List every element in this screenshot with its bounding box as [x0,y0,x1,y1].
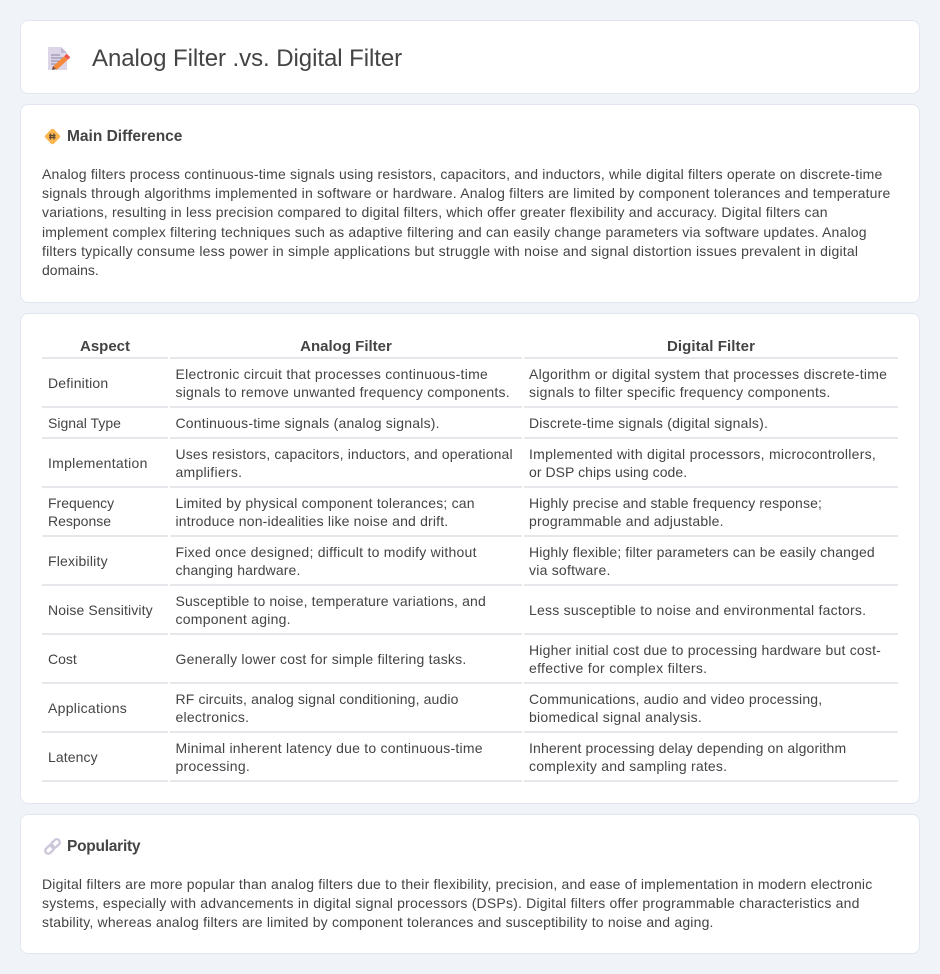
row: noise sensitivity [42,593,898,635]
row: flexibility [42,544,898,586]
row: implementation [42,446,898,488]
row: signal type: Signal Type [48,415,121,431]
table header: analog filter: Analog Filter [300,338,392,355]
row: latency: Latency [48,749,98,765]
row: definition: Electronic circuit that processes continuous-time [176,366,488,382]
row: cost [42,642,898,684]
text block: main difference: filters typically consume less power in simple applications but struggle with noise and signal distortion issues prevalent in digital [42,243,858,259]
text block: popularity: systems, especially with advancements in digital signal processors (DSPs). Digital filters offer programmable characteristics and [42,895,860,911]
text block: main difference [42,166,891,278]
row: cost: Cost [48,651,77,667]
table header: digital filter: Digital Filter [667,338,755,355]
row: latency: processing. [176,758,250,774]
row: implementation: Uses resistors, capacitors, inductors, and operational [176,446,513,462]
row: implementation: or DSP chips using code. [529,464,687,480]
row: frequency response: Response [48,513,111,529]
panel: comparison table [20,313,920,804]
heading: popularity: Popularity [67,838,140,855]
row: frequency response: Frequency [48,495,114,511]
row: signal type: Discrete-time signals (digital signals). [529,415,768,431]
row: implementation: amplifiers. [176,464,242,480]
row: noise sensitivity: Susceptible to noise, temperature variations, and [176,593,486,609]
row: frequency response: programmable and adjustable. [529,513,724,529]
row: flexibility: Flexibility [48,553,108,569]
row: noise sensitivity: Noise Sensitivity [48,602,153,618]
row: flexibility: via software. [529,562,611,578]
row: signal type: Continuous-time signals (analog signals). [176,415,440,431]
panel: main difference [20,104,920,303]
header card [20,20,920,94]
table header: aspect [42,337,168,359]
icon: chain link [44,838,61,855]
row: noise sensitivity: Less susceptible to noise and environmental factors. [529,602,866,618]
row: latency: complexity and sampling rates. [529,758,727,774]
text block: popularity [42,876,872,930]
row: cost: Higher initial cost due to processing hardware but cost- [529,642,881,658]
row: definition: Definition [48,375,108,391]
row: signal type [42,415,898,439]
row: applications: biomedical signal analysis. [529,709,702,725]
row: implementation: Implementation [48,455,148,471]
row: applications: Applications [48,700,127,716]
row: applications: RF circuits, analog signal conditioning, audio [176,691,459,707]
text block: popularity: Digital filters are more popular than analog filters due to their flexibility, precision, and ease of implementation in modern electronic [42,876,872,892]
row: definition: signals to remove unwanted frequency components. [176,384,510,400]
text block: main difference: signals through algorithms implemented in software or hardware. Analog filters are limited by component tolerances and temperature [42,185,891,201]
icon: document with pencil [48,47,70,70]
row: cost: Generally lower cost for simple filtering tasks. [176,651,466,667]
panel: popularity [20,814,920,954]
row: frequency response: introduce non-idealities like noise and drift. [176,513,448,529]
row: frequency response: Limited by physical component tolerances; can [176,495,475,511]
row: flexibility: Fixed once designed; difficult to modify without [176,544,477,560]
row: frequency response [42,495,898,537]
row: applications: Communications, audio and video processing, [529,691,822,707]
row: frequency response: Highly precise and stable frequency response; [529,495,822,511]
text block: main difference: domains. [42,262,99,278]
row: definition: signals to filter specific frequency components. [529,384,830,400]
heading: main difference: Main Difference [67,128,182,145]
row: definition [42,366,898,408]
row: implementation: Implemented with digital processors, microcontrollers, [529,446,876,462]
text block: main difference: implement complex filtering techniques such as adaptive filtering and can easily change parameters via software updates. Analog [42,224,867,240]
row: definition: Algorithm or digital system that processes discrete-time [529,366,887,382]
icon: warning diamond [44,128,60,144]
row: flexibility: changing hardware. [176,562,300,578]
table header: digital filter [524,337,898,359]
row: noise sensitivity: component aging. [176,611,291,627]
row: latency [42,740,898,782]
table header: aspect: Aspect [80,338,130,355]
row: latency: Inherent processing delay depending on algorithm [529,740,846,756]
row: cost: effective for complex filters. [529,660,707,676]
title: Analog Filter .vs. Digital Filter [92,45,402,72]
table header: analog filter [170,337,522,359]
text block: main difference: variations, resulting in less precision compared to digital filters, which offer greater flexibility and accuracy. Digital filters can [42,204,828,220]
row: latency: Minimal inherent latency due to continuous-time [176,740,483,756]
row: applications: electronics. [176,709,249,725]
text block: main difference: Analog filters process continuous-time signals using resistors, capacitors, and inductors, while digital filters operate on discrete-time [42,166,883,182]
row: flexibility: Highly flexible; filter parameters can be easily changed [529,544,875,560]
text block: popularity: stability, whereas analog filters are limited by component tolerances and susceptibility to noise and aging. [42,914,714,930]
row: applications [42,691,898,733]
